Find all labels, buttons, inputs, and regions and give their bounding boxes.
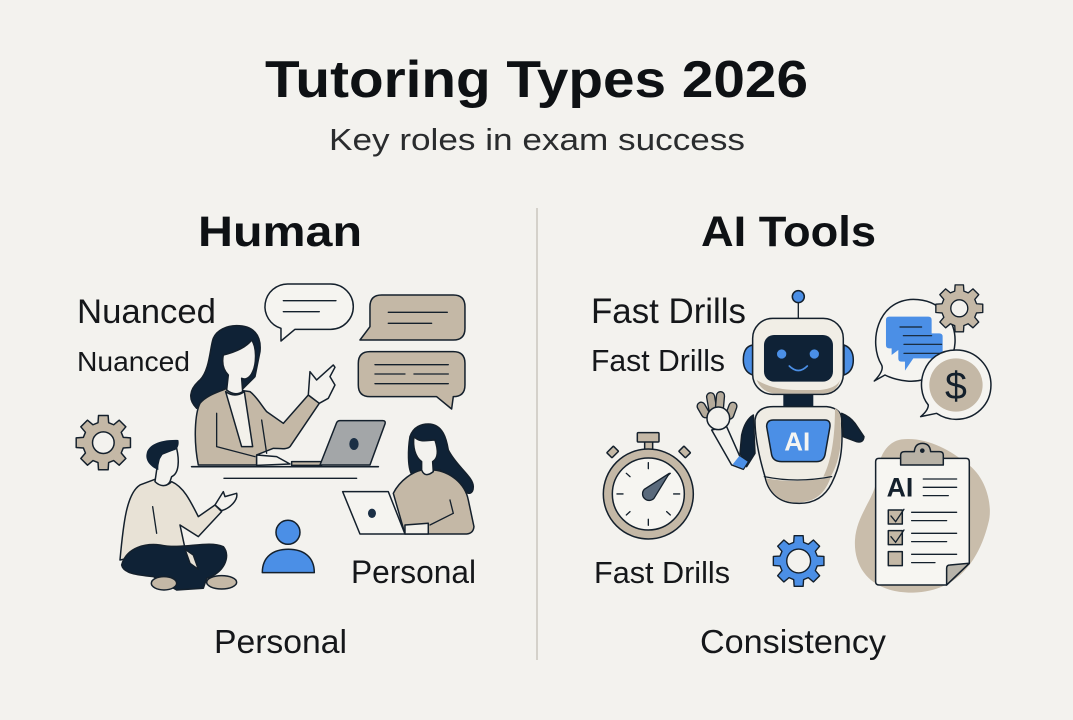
figure: robot bbox=[696, 291, 864, 503]
heading: AI Tools: AI Tools bbox=[701, 208, 876, 256]
title: Tutoring Types 2026 bbox=[265, 51, 808, 109]
label: Personal bottom: Personal bbox=[214, 623, 347, 660]
panel: AI tools illustration bbox=[603, 285, 991, 593]
label: Consistency: Consistency bbox=[700, 623, 887, 660]
icon: AI checklist clipboard: AI bbox=[887, 473, 913, 503]
icon: tan speech bubble top bbox=[360, 295, 465, 340]
icon: blue gear bbox=[773, 536, 824, 586]
label: Nuanced small: Nuanced bbox=[77, 346, 190, 377]
icon: tan speech bubble bottom bbox=[358, 352, 465, 409]
subtitle: Key roles in exam success bbox=[329, 122, 745, 157]
icon: dollar bubble: $ bbox=[945, 364, 967, 408]
label: Fast Drills small: Fast Drills bbox=[591, 343, 725, 378]
label: Fast Drills bottom: Fast Drills bbox=[594, 555, 730, 590]
icon: blue person bbox=[262, 520, 314, 573]
icon: AI checklist clipboard bbox=[876, 443, 969, 585]
icon: white speech bubble bbox=[265, 284, 353, 341]
panel: human illustration bbox=[76, 284, 474, 590]
figure: robot: AI bbox=[784, 427, 810, 457]
icon: tan gear bbox=[76, 416, 130, 470]
icon: chat bubble with blue messages bbox=[874, 299, 955, 381]
figure: student with laptop bbox=[343, 424, 474, 534]
icon: dollar bubble bbox=[921, 350, 991, 419]
heading: Human: Human bbox=[198, 208, 362, 256]
figure: teacher with laptop bbox=[191, 326, 385, 478]
label: Personal right: Personal bbox=[351, 554, 476, 590]
label: Fast Drills large: Fast Drills bbox=[591, 292, 746, 331]
icon: stopwatch bbox=[603, 433, 693, 539]
label: Nuanced large: Nuanced bbox=[77, 293, 216, 331]
figure: seated student bbox=[120, 440, 237, 590]
icon: tan gear top right bbox=[936, 285, 983, 332]
shape: tan blob behind clipboard bbox=[855, 439, 990, 593]
